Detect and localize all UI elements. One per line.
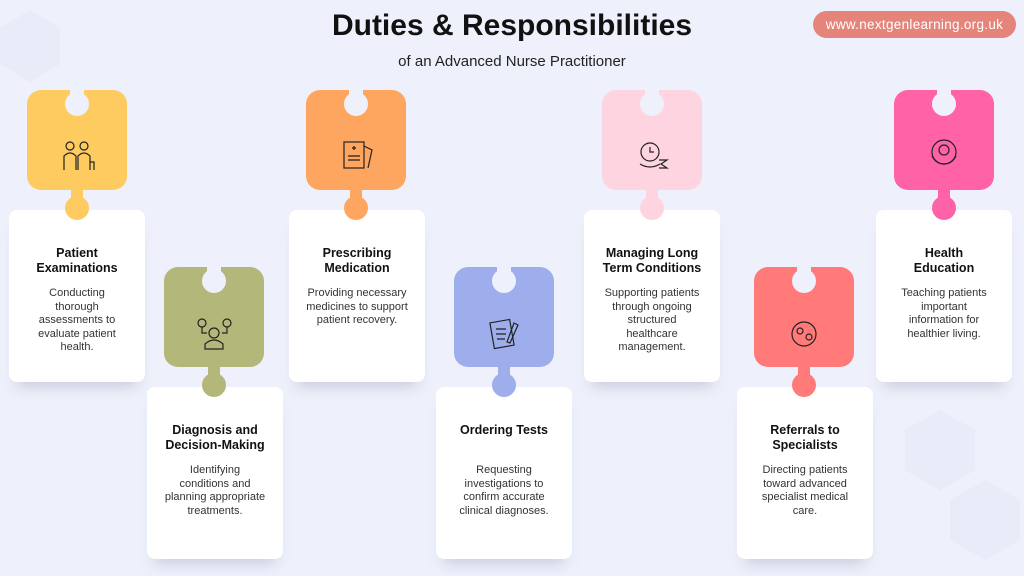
card: referrals: Referrals to — [770, 423, 840, 437]
card: patient examinations: health. — [60, 341, 94, 353]
title: Duties & Responsibilities — [332, 9, 692, 42]
card: long term: Managing Long — [606, 246, 698, 260]
card: patient examinations: assessments to — [39, 314, 115, 326]
card: patient examinations: Conducting — [49, 287, 105, 299]
card: ordering tests: Ordering Tests — [460, 423, 548, 437]
card: prescribing — [289, 210, 425, 382]
tile: long term — [602, 90, 702, 220]
card: referrals: Specialists — [772, 438, 838, 452]
card: long term: management. — [618, 341, 686, 353]
tile: prescribing — [306, 90, 406, 220]
card: prescribing: Providing necessary — [307, 287, 407, 299]
card: patient examinations — [9, 210, 145, 382]
card: long term: through ongoing — [612, 300, 692, 312]
card: referrals: specialist medical — [762, 491, 848, 503]
card: long term: Term Conditions — [603, 261, 701, 275]
tile: health education — [894, 90, 994, 220]
card: long term: Supporting patients — [605, 287, 699, 299]
tile: ordering tests — [454, 267, 554, 397]
card: prescribing: patient recovery. — [317, 314, 397, 326]
card: health education: important — [921, 300, 967, 312]
card: health education: Health — [925, 246, 963, 260]
card: health education: Education — [914, 261, 974, 275]
card: referrals: Directing patients — [762, 464, 848, 476]
tile: referrals — [754, 267, 854, 397]
card: patient examinations: Patient — [56, 246, 98, 260]
card: referrals: toward advanced — [763, 478, 847, 490]
card: prescribing: Medication — [324, 261, 390, 275]
card: prescribing: medicines to support — [306, 300, 408, 312]
card: diagnosis: treatments. — [187, 504, 243, 516]
card: diagnosis: Diagnosis and — [172, 423, 258, 437]
card: ordering tests: clinical diagnoses. — [459, 504, 549, 516]
card: ordering tests: confirm accurate — [463, 491, 545, 503]
card: referrals: care. — [793, 504, 817, 516]
card: prescribing: Prescribing — [323, 246, 391, 260]
subtitle: of an Advanced Nurse Practitioner — [398, 53, 626, 70]
card: ordering tests: Requesting — [476, 464, 532, 476]
card: long term — [584, 210, 720, 382]
card: patient examinations: Examinations — [36, 261, 118, 275]
card: diagnosis: conditions and — [180, 478, 250, 490]
card: health education: Teaching patients — [901, 287, 987, 299]
url badge — [813, 11, 1016, 38]
url badge: www.nextgenlearning.org.uk — [826, 17, 1003, 32]
card: long term: healthcare — [626, 328, 678, 340]
card: ordering tests: investigations to — [465, 478, 543, 490]
card: diagnosis: planning appropriate — [165, 491, 265, 503]
card: long term: structured — [628, 314, 676, 326]
card: health education — [876, 210, 1012, 382]
tile: diagnosis — [164, 267, 264, 397]
card: ordering tests — [436, 387, 572, 559]
card: referrals — [737, 387, 873, 559]
card: health education: information for — [909, 314, 979, 326]
tile: patient examinations — [27, 90, 127, 220]
card: health education: healthier living. — [907, 328, 981, 340]
card: diagnosis — [147, 387, 283, 559]
card: diagnosis: Decision-Making — [165, 438, 265, 452]
card: diagnosis: Identifying — [190, 464, 240, 476]
card: patient examinations: thorough — [55, 300, 99, 312]
card: patient examinations: evaluate patient — [38, 328, 116, 340]
